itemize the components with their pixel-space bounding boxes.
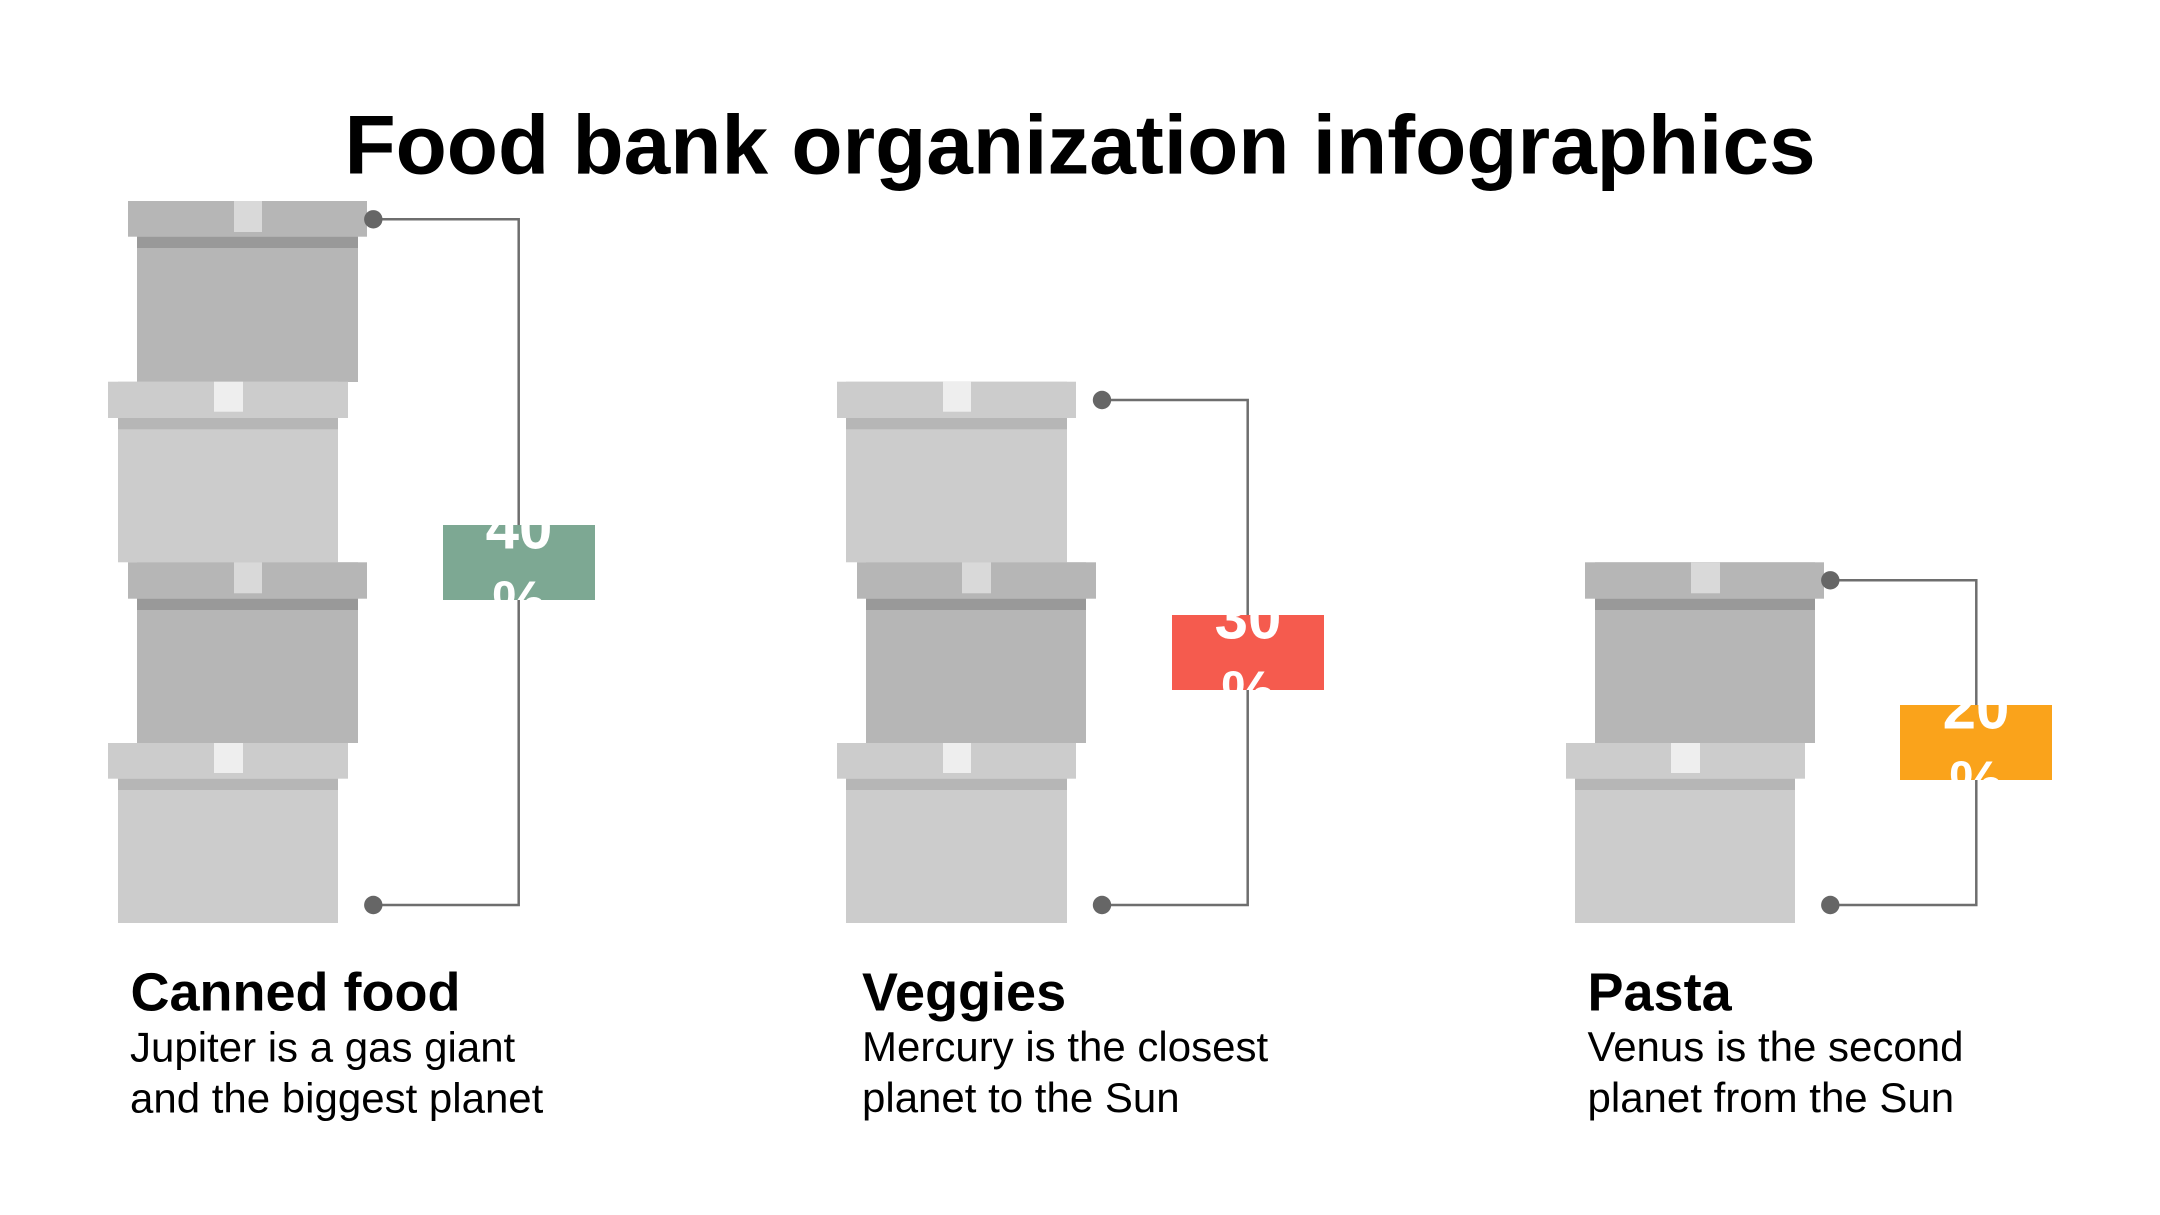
- percentage badge: 30%: [1172, 584, 1324, 726]
- caption: canned food: Jupiter is a gas giant: [130, 1024, 516, 1070]
- bracket connector: pasta: [1821, 571, 1976, 914]
- percentage badge: 40%: [443, 494, 595, 636]
- box stack: pasta: [1566, 562, 1824, 923]
- percentage badge: 30%: 30: [1215, 584, 1281, 652]
- caption: pasta: Venus is the second: [1588, 1023, 1963, 1070]
- caption: pasta: Pasta: [1588, 962, 1733, 1022]
- panel: pasta: [1566, 562, 2052, 1121]
- percentage badge: 40%: 40: [486, 494, 552, 562]
- percentage badge: 30%: %: [1221, 659, 1275, 726]
- box stack: veggies: [837, 382, 1096, 923]
- bracket connector: canned food: [364, 210, 519, 914]
- caption: canned food: and the biggest planet: [130, 1074, 544, 1122]
- box stack: canned food: [108, 201, 367, 923]
- caption: pasta: planet from the Sun: [1588, 1074, 1954, 1121]
- caption: canned food: [130, 962, 544, 1122]
- panel: veggies: [837, 382, 1324, 1121]
- percentage badge: 40%: %: [492, 569, 546, 636]
- caption: veggies: Mercury is the closest: [862, 1023, 1268, 1070]
- percentage badge: 20%: [1900, 674, 2052, 816]
- bracket connector: veggies: [1093, 391, 1248, 914]
- caption: veggies: planet to the Sun: [862, 1074, 1180, 1121]
- caption: canned food: Canned food: [130, 962, 460, 1022]
- caption: veggies: [862, 962, 1268, 1121]
- caption: pasta: [1588, 962, 1963, 1121]
- title: Food bank organization infographics: [344, 98, 1816, 192]
- panel: canned food: [108, 201, 595, 1122]
- caption: veggies: Veggies: [862, 962, 1066, 1022]
- percentage badge: 20%: 20: [1943, 674, 2009, 742]
- percentage badge: 20%: %: [1949, 749, 2003, 816]
